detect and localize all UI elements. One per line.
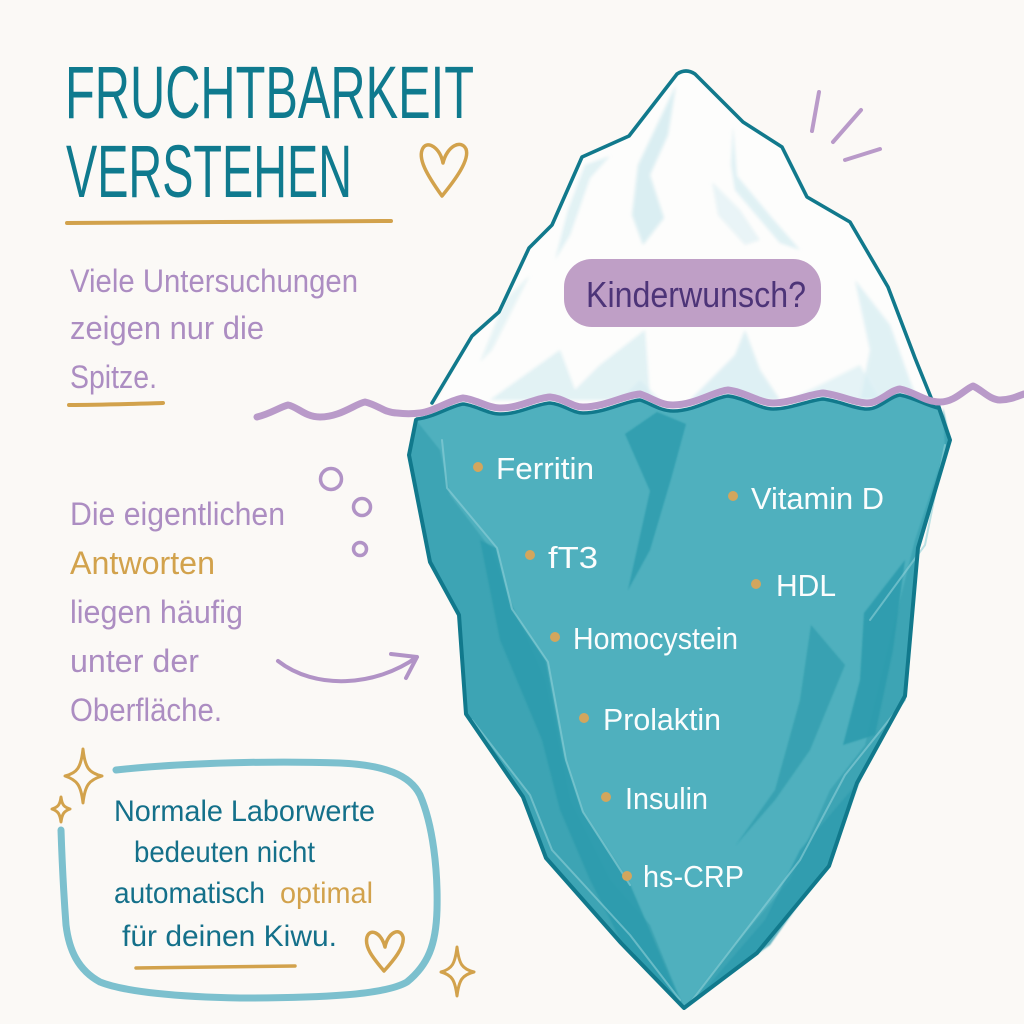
text block: answers: liegen häufig [70,594,243,630]
text block: answers: unter der [70,643,199,679]
callout underline [136,966,295,968]
callout outline [61,762,437,998]
iceberg tip [432,71,938,412]
callout text: bedeuten nicht [134,836,316,869]
icon: bubbles [320,468,370,556]
title underline [67,221,391,223]
icon: heart in callout [366,932,403,971]
callout text: optimal [280,877,373,910]
text block: answers: Oberfläche. [70,692,222,728]
label: Vitamin D: Vitamin D [751,481,884,516]
label: hs-CRP: hs-CRP [643,859,744,894]
label: Insulin: Insulin [625,781,708,816]
label: HDL [751,568,836,603]
arrow to iceberg [278,654,417,681]
submerged body [409,395,950,1009]
text block: answers: Antworten [70,545,215,581]
title: FRUCHTBARKEIT [65,51,474,134]
label: Homocystein: Homocystein [573,621,738,656]
icon: heart near title [421,144,467,196]
intro underline [69,403,163,405]
text block: intro: zeigen nur die [70,310,264,346]
text block: intro: Viele Untersuchungen [70,263,358,299]
label: fT3 [525,540,598,575]
callout text: für deinen Kiwu. [122,920,337,953]
underwater dark crevices [480,412,905,1005]
icon: sparkles [52,749,474,996]
text block: intro [70,263,358,395]
underwater edge shading [409,408,950,1009]
submerged outline [409,402,950,1008]
label: Ferritin: Ferritin [496,451,594,486]
title: VERSTEHEN [66,130,352,213]
iceberg tip outline [432,71,934,405]
callout text: automatisch [114,877,265,910]
label: Prolaktin: Prolaktin [603,702,721,737]
labels list [473,451,884,894]
underwater light highlights [442,440,945,1003]
label: HDL: HDL [776,568,836,603]
label: fT3: fT3 [548,540,598,575]
waterline edge [417,395,938,419]
question pill: Kinderwunsch? [586,274,806,315]
callout box [61,762,437,998]
icon: emphasis strokes [812,92,880,160]
question pill [564,259,821,327]
iceberg [409,71,950,1009]
callout text [114,795,375,953]
water surface wave [257,386,1024,417]
title [65,51,474,213]
text block: answers [70,496,285,728]
ice facets [480,85,917,400]
text block: intro: Spitze. [70,359,157,395]
text block: answers: Die eigentlichen [70,496,285,532]
callout text: Normale Laborwerte [114,795,375,828]
